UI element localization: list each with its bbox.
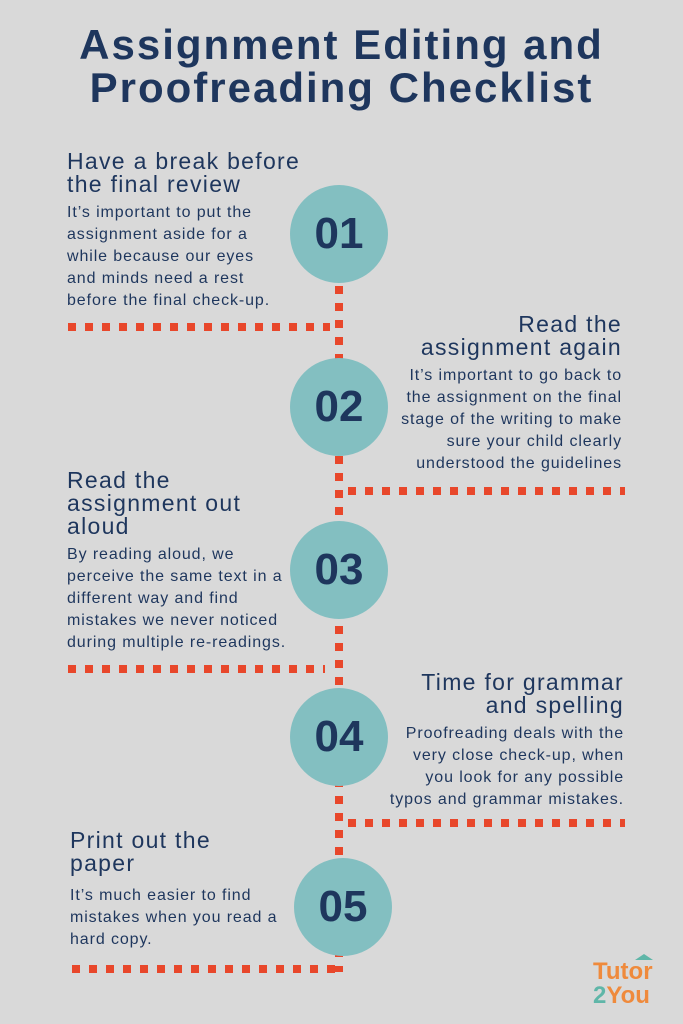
step 5 text: It’s much easier to find (70, 887, 251, 904)
step 1 text (67, 148, 300, 309)
step 4 text: Time for grammar (421, 669, 624, 695)
step 3 text: Read the (67, 467, 171, 493)
circle 02 (290, 358, 388, 456)
step 3 text: different way and find (67, 590, 239, 607)
step 2 text: sure your child clearly (447, 433, 622, 450)
step 1 text: before the final check-up. (67, 292, 270, 309)
step 3 text (67, 467, 286, 651)
step 2 text: assignment again (421, 334, 622, 360)
icon: grad cap (635, 954, 653, 960)
step 5 text: hard copy. (70, 931, 153, 948)
title: Proofreading Checklist (90, 64, 593, 111)
step 3 text: perceive the same text in a (67, 568, 283, 585)
step 5 text: paper (70, 850, 135, 876)
step 2 text (401, 311, 622, 472)
logo (593, 954, 653, 1009)
step 1 text: while because our eyes (67, 248, 254, 265)
step 1 text: and minds need a rest (67, 270, 244, 287)
step 4 text: Proofreading deals with the (406, 725, 624, 742)
step 3 text: mistakes we never noticed (67, 612, 278, 629)
step 1 text: the final review (67, 171, 241, 197)
step 5 text (70, 827, 277, 948)
step 3 text: By reading aloud, we (67, 546, 234, 563)
step 2 text: It’s important to go back to (409, 367, 622, 384)
circle 03: 03 (315, 545, 363, 594)
circle 04: 04 (315, 712, 363, 761)
step 4 text (390, 669, 624, 808)
step 2 text: Read the (518, 311, 622, 337)
step 3 text: aloud (67, 513, 130, 539)
step 3 text: assignment out (67, 490, 241, 516)
step 1 text: assignment aside for a (67, 226, 248, 243)
circle 01 (290, 185, 388, 283)
step 2 text: understood the guidelines (416, 455, 622, 472)
circle 02: 02 (315, 382, 363, 431)
circle 04 (290, 688, 388, 786)
step 3 text: during multiple re-readings. (67, 634, 286, 651)
step 2 text: the assignment on the final (406, 389, 622, 406)
step 2 text: stage of the writing to make (401, 411, 622, 428)
step 1 text: It’s important to put the (67, 204, 252, 221)
step 4 text: you look for any possible (425, 769, 624, 786)
circle 03 (290, 521, 388, 619)
title: Assignment Editing and (79, 21, 604, 68)
logo: Tutor (593, 958, 653, 985)
step 5 text: mistakes when you read a (70, 909, 277, 926)
step 4 text: typos and grammar mistakes. (390, 791, 624, 808)
step 4 text: and spelling (486, 692, 624, 718)
step 5 text: Print out the (70, 827, 211, 853)
step 4 text: very close check-up, when (413, 747, 624, 764)
step 1 text: Have a break before (67, 148, 300, 174)
circle 01: 01 (315, 209, 363, 258)
title (79, 21, 604, 111)
circle 05: 05 (319, 882, 367, 931)
logo: 2You (593, 982, 650, 1009)
circle 05 (294, 858, 392, 956)
